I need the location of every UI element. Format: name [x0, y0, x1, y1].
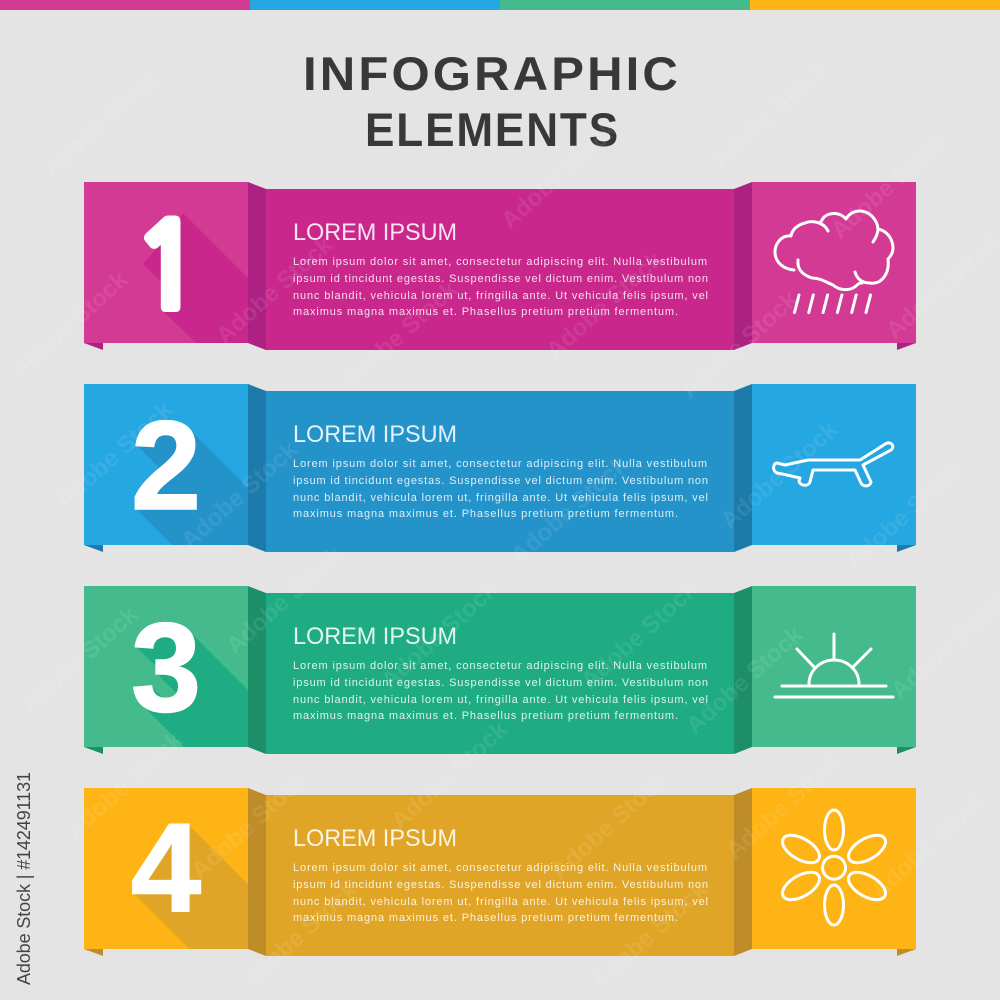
watermark: Adobe Stock	[336, 276, 464, 394]
watermark: Adobe Stock	[186, 766, 314, 884]
icon: rain cloud	[775, 211, 893, 312]
watermark: Adobe Stock	[506, 451, 634, 569]
watermark: Adobe Stock	[541, 246, 669, 364]
title: INFOGRAPHIC	[303, 47, 681, 100]
text block: nunc blandit, vehicula lorem ut, fringilla ante. Ut vehicula felis ipsum, vel	[293, 492, 708, 504]
title	[303, 47, 681, 156]
watermark: Adobe Stock	[676, 286, 804, 404]
text block: nunc blandit, vehicula lorem ut, fringilla ante. Ut vehicula felis ipsum, vel	[293, 694, 708, 706]
watermark: Adobe Stock	[586, 876, 714, 994]
text block: nunc blandit, vehicula lorem ut, fringilla ante. Ut vehicula felis ipsum, vel	[293, 896, 708, 908]
title: ELEMENTS	[365, 103, 620, 156]
text block: maximus magna maximus et. Phasellus pretium pretium fermentum.	[293, 710, 678, 722]
text block: ipsum id tincidunt egestas. Suspendisse vel dictum enim. Vestibulum non	[293, 677, 708, 689]
text block	[293, 210, 894, 318]
text block	[293, 808, 888, 926]
watermark: Adobe Stock	[236, 876, 364, 994]
watermark: Adobe Stock	[866, 786, 994, 904]
watermark: Adobe Stock	[706, 56, 834, 174]
number 4: 4	[131, 797, 201, 938]
text block: LOREM IPSUM	[293, 825, 457, 852]
watermark: Adobe Stock	[721, 746, 849, 864]
text block: maximus magna maximus et. Phasellus pretium pretium fermentum.	[293, 508, 678, 520]
watermark: Adobe Stock	[176, 436, 304, 554]
number 1: 1	[132, 209, 204, 326]
watermark: Adobe Stock	[576, 576, 704, 694]
text block: LOREM IPSUM	[293, 623, 457, 650]
text block: Lorem ipsum dolor sit amet, consectetur adipiscing elit. Nulla vestibulum	[293, 660, 707, 672]
watermark: Adobe Stock	[386, 716, 514, 834]
icon: flower	[778, 810, 890, 925]
text block: ipsum id tincidunt egestas. Suspendisse vel dictum enim. Vestibulum non	[293, 273, 708, 285]
panel: step 2	[84, 384, 916, 552]
text block: maximus magna maximus et. Phasellus pretium pretium fermentum.	[293, 306, 678, 318]
watermark: Adobe Stock	[841, 456, 969, 574]
side credit label: Adobe Stock | #142491131	[14, 772, 34, 985]
icon: sunrise	[775, 634, 893, 697]
text block: ipsum id tincidunt egestas. Suspendisse vel dictum enim. Vestibulum non	[293, 475, 708, 487]
watermark: Adobe Stock	[716, 416, 844, 534]
text block: LOREM IPSUM	[293, 421, 457, 448]
text block: nunc blandit, vehicula lorem ut, fringilla ante. Ut vehicula felis ipsum, vel	[293, 290, 708, 302]
icon: sun lounger	[774, 443, 893, 486]
text block: LOREM IPSUM	[293, 219, 457, 246]
watermark: Adobe Stock	[211, 231, 339, 349]
text block: Lorem ipsum dolor sit amet, consectetur adipiscing elit. Nulla vestibulum	[293, 256, 707, 268]
panel: step 1	[84, 182, 916, 350]
watermark: Adobe Stock	[51, 396, 179, 514]
watermark: Adobe Stock	[61, 726, 189, 844]
watermark: Adobe Stock	[681, 621, 809, 739]
panel: step 4	[84, 788, 916, 956]
number 2: 2	[131, 395, 201, 536]
text block	[293, 421, 894, 520]
panel: step 3	[84, 586, 916, 754]
watermark: Adobe Stock	[6, 266, 134, 384]
watermark: Adobe Stock	[376, 576, 504, 694]
watermark: Adobe Stock	[38, 64, 166, 182]
watermark: Adobe Stock	[826, 126, 954, 244]
text block	[293, 623, 894, 722]
watermark: Adobe Stock	[546, 766, 674, 884]
watermark: Adobe Stock	[16, 601, 144, 719]
watermark: Adobe Stock	[221, 541, 349, 659]
watermark: Adobe Stock	[496, 116, 624, 234]
text block: ipsum id tincidunt egestas. Suspendisse vel dictum enim. Vestibulum non	[293, 879, 708, 891]
text block: Lorem ipsum dolor sit amet, consectetur adipiscing elit. Nulla vestibulum	[293, 862, 707, 874]
text block: Lorem ipsum dolor sit amet, consectetur adipiscing elit. Nulla vestibulum	[293, 458, 707, 470]
text block: maximus magna maximus et. Phasellus pretium pretium fermentum.	[293, 912, 678, 924]
top colour stripe	[0, 0, 1000, 10]
number 3: 3	[131, 597, 201, 738]
